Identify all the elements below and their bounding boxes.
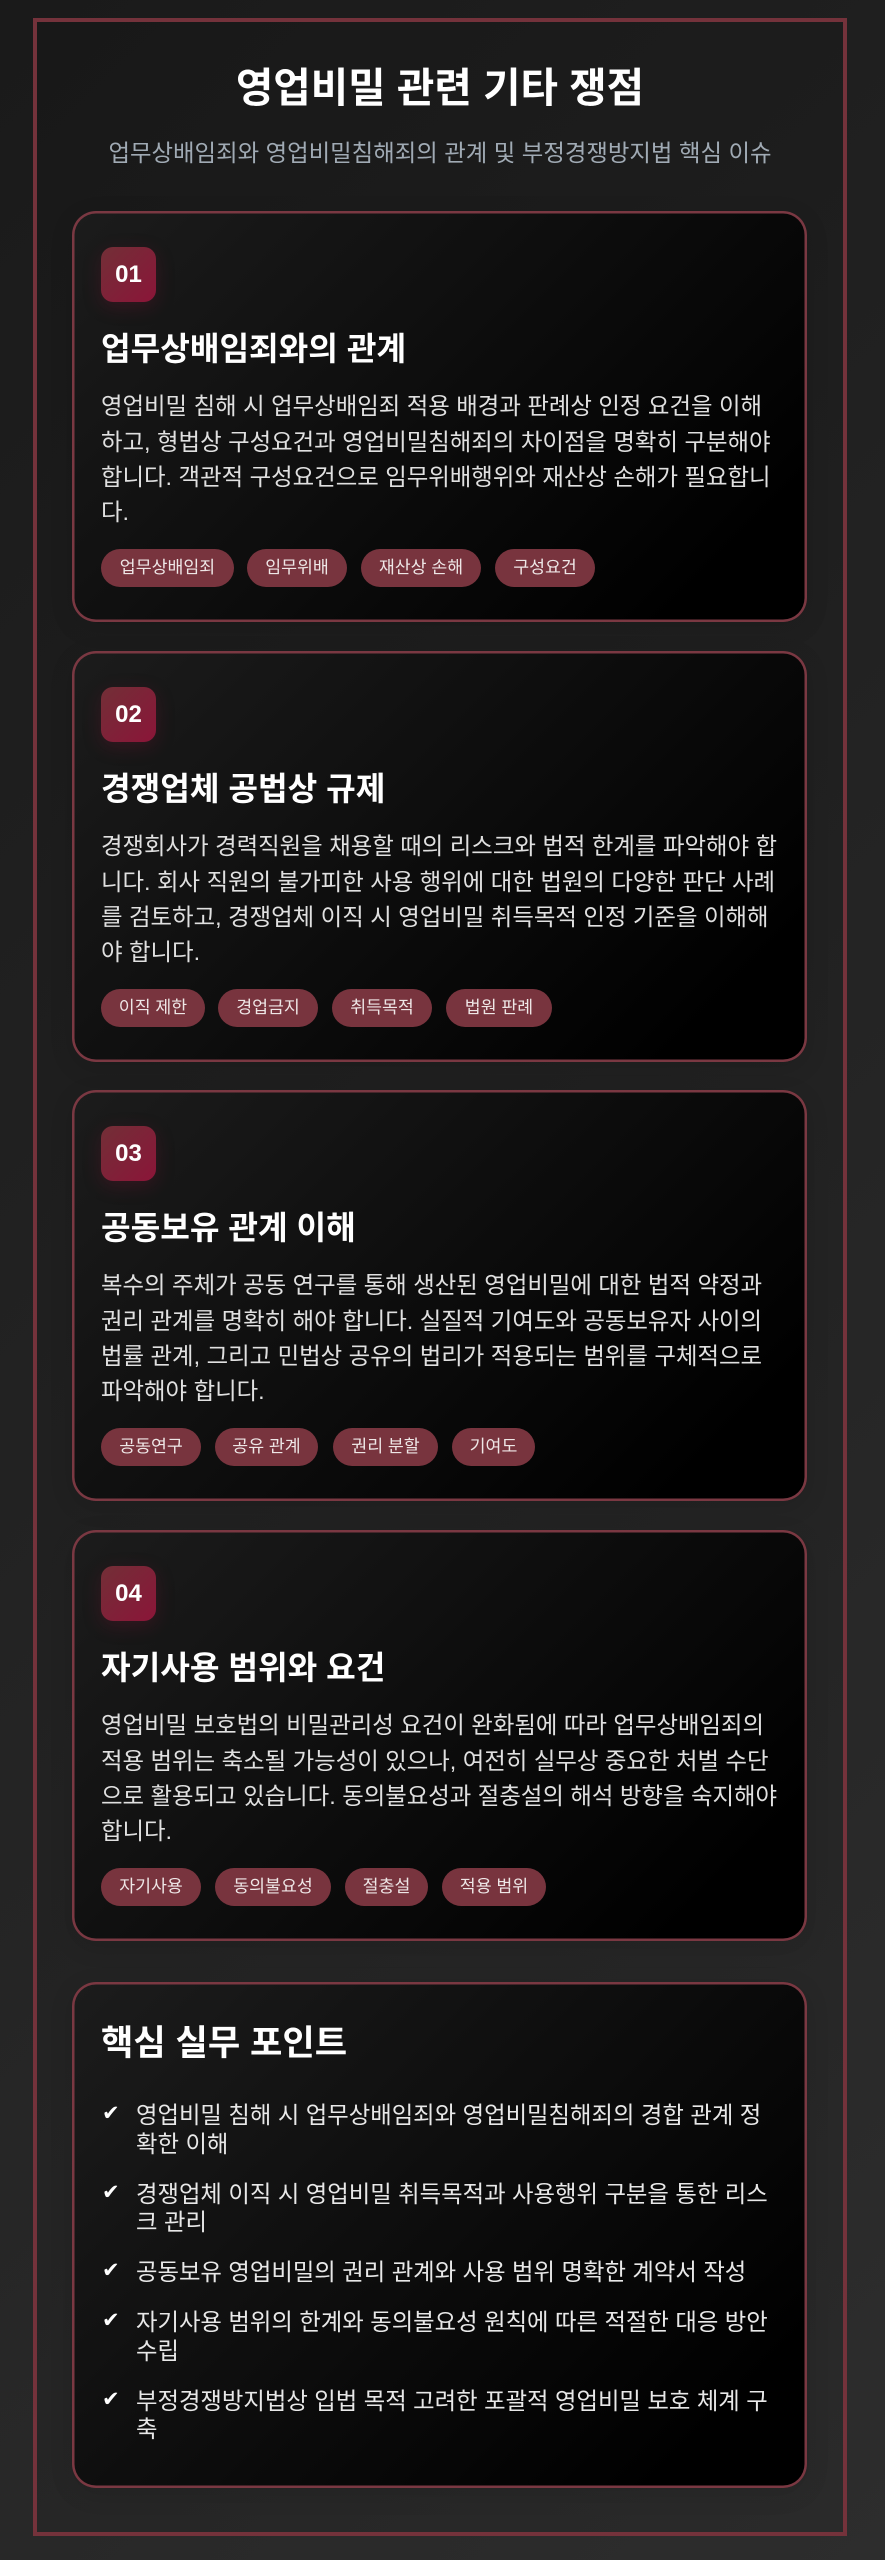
panel: card 02 <box>72 651 807 1062</box>
tags 03 <box>101 1428 535 1466</box>
tags 04 <box>101 1868 546 1906</box>
badge 04 <box>101 1566 156 1621</box>
body text 01: 영업비밀 침해 시 업무상배임죄 적용 배경과 판례상 인정 요건을 이해 <box>101 393 762 419</box>
tags 01: 구성요건 <box>513 557 577 577</box>
body text 03: 파악해야 합니다. <box>101 1378 265 1404</box>
body text 02: 야 합니다. <box>101 939 200 965</box>
key points list: ✔ <box>102 2258 120 2282</box>
tags 04: 절충설 <box>363 1876 410 1896</box>
badge 01 <box>101 247 156 302</box>
body text 02: 니다. 회사 직원의 불가피한 사용 행위에 대한 법원의 다양한 판단 사례 <box>101 869 775 895</box>
tags 03: 기여도 <box>470 1436 517 1456</box>
body text 01: 다. <box>101 499 129 525</box>
subtitle: 업무상배임죄와 영업비밀침해죄의 관계 및 부정경쟁방지법 핵심 이슈 <box>108 140 772 166</box>
tags 01: 업무상배임죄 <box>120 557 215 577</box>
key points list: ✔ <box>102 2387 120 2411</box>
key points list: ✔ <box>102 2101 120 2125</box>
body text 01 <box>101 393 771 525</box>
tags 02: 취득목적 <box>350 997 414 1017</box>
tags 02: 이직 제한 <box>119 997 187 1017</box>
key points list: ✔ <box>102 2308 120 2332</box>
heading 01: 업무상배임죄와의 관계 <box>101 331 406 367</box>
tags 01: 재산상 손해 <box>379 557 463 577</box>
key points list <box>102 2101 768 2442</box>
body text 04: 합니다. <box>101 1818 172 1844</box>
badge 02: 02 <box>115 701 142 728</box>
tags 03: 공유 관계 <box>232 1436 301 1456</box>
badge 03 <box>101 1126 156 1181</box>
key points list: 자기사용 범위의 한계와 동의불요성 원칙에 따른 적절한 대응 방안 <box>136 2309 768 2335</box>
tags 02: 법원 판례 <box>465 997 533 1017</box>
tags 04: 동의불요성 <box>233 1876 313 1896</box>
panel: key practice points <box>72 1982 807 2488</box>
heading 02: 경쟁업체 공법상 규제 <box>101 771 385 807</box>
key points list: 공동보유 영업비밀의 권리 관계와 사용 범위 명확한 계약서 작성 <box>136 2259 746 2285</box>
tags 04: 적용 범위 <box>460 1876 528 1896</box>
key points list: 영업비밀 침해 시 업무상배임죄와 영업비밀침해죄의 경합 관계 정 <box>136 2102 761 2128</box>
key points list: 부정경쟁방지법상 입법 목적 고려한 포괄적 영업비밀 보호 체계 구 <box>136 2388 768 2414</box>
tags 01: 임무위배 <box>265 557 329 577</box>
heading 04: 자기사용 범위와 요건 <box>101 1650 385 1686</box>
key points heading: 핵심 실무 포인트 <box>101 2024 347 2063</box>
body text 04 <box>101 1712 777 1844</box>
key points list: 축 <box>136 2416 157 2442</box>
title: 영업비밀 관련 기타 쟁점 <box>236 65 644 111</box>
badge 02 <box>101 687 156 742</box>
body text 02 <box>101 833 777 965</box>
key points list: ✔ <box>102 2180 120 2204</box>
tags 01 <box>101 549 595 587</box>
body text 04: 적용 범위는 축소될 가능성이 있으나, 여전히 실무상 중요한 처벌 수단 <box>101 1748 769 1774</box>
body text 03: 법률 관계, 그리고 민법상 공유의 법리가 적용되는 범위를 구체적으로 <box>101 1343 762 1369</box>
tags 04: 자기사용 <box>119 1876 183 1896</box>
body text 04: 으로 활용되고 있습니다. 동의불요성과 절충설의 해석 방향을 숙지해야 <box>101 1783 777 1809</box>
body text 02: 를 검토하고, 경쟁업체 이직 시 영업비밀 취득목적 인정 기준을 이해해 <box>101 904 769 930</box>
key points list: 수립 <box>136 2338 179 2364</box>
badge 01: 01 <box>115 261 142 288</box>
tags 03: 공동연구 <box>119 1436 183 1456</box>
badge 04: 04 <box>115 1580 142 1607</box>
body text 01: 합니다. 객관적 구성요건으로 임무위배행위와 재산상 손해가 필요합니 <box>101 464 771 490</box>
key points list: 확한 이해 <box>136 2131 228 2157</box>
body text 03 <box>101 1272 762 1404</box>
body text 01: 하고, 형법상 구성요건과 영업비밀침해죄의 차이점을 명확히 구분해야 <box>101 429 771 455</box>
tags 02: 경업금지 <box>236 997 300 1017</box>
heading 03: 공동보유 관계 이해 <box>101 1210 356 1246</box>
body text 03: 권리 관계를 명확히 해야 합니다. 실질적 기여도와 공동보유자 사이의 <box>101 1308 762 1334</box>
body text 02: 경쟁회사가 경력직원을 채용할 때의 리스크와 법적 한계를 파악해야 합 <box>101 833 777 859</box>
key points list: 크 관리 <box>136 2209 207 2235</box>
tags 03: 권리 분할 <box>351 1436 420 1456</box>
panel: card 03 <box>72 1090 807 1501</box>
badge 03: 03 <box>115 1140 142 1167</box>
body text 04: 영업비밀 보호법의 비밀관리성 요건이 완화됨에 따라 업무상배임죄의 <box>101 1712 764 1738</box>
body text 03: 복수의 주체가 공동 연구를 통해 생산된 영업비밀에 대한 법적 약정과 <box>101 1272 762 1298</box>
panel: card 04 <box>72 1530 807 1941</box>
key points list: 경쟁업체 이직 시 영업비밀 취득목적과 사용행위 구분을 통한 리스 <box>136 2181 768 2207</box>
tags 02 <box>101 989 552 1027</box>
panel: card 01 <box>72 211 807 622</box>
